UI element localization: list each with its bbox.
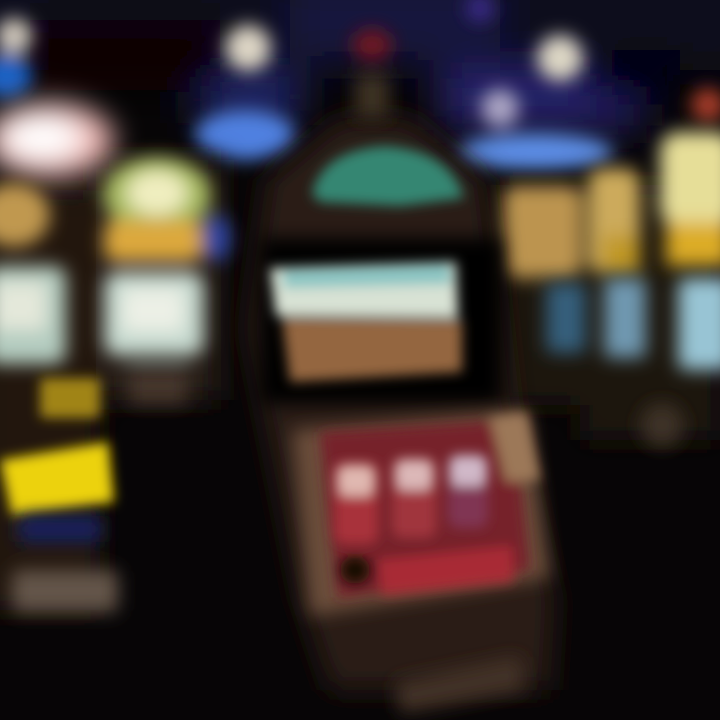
cabinet base [395, 656, 525, 714]
lower left details [12, 516, 118, 612]
screen [270, 262, 462, 382]
right screens [546, 278, 720, 447]
left machines [0, 102, 231, 612]
cabinet body [246, 118, 555, 690]
lower panel frame [292, 410, 550, 616]
red reel panel [320, 412, 540, 598]
red knob [352, 29, 392, 118]
left machine body [0, 160, 221, 610]
ceiling: dark blue and purple glow [0, 0, 720, 130]
yellow panels [0, 378, 114, 516]
second machine topper and screen [103, 157, 231, 404]
right toppers [502, 132, 720, 278]
ceiling lights [0, 0, 720, 171]
pink sign top [0, 102, 114, 178]
right machines [500, 132, 720, 447]
tan panel and left screen [0, 183, 66, 364]
right machine bodies [500, 185, 720, 440]
reels [334, 454, 488, 584]
central slot machine [246, 29, 555, 714]
dark band around screen [260, 238, 502, 404]
teal topper [312, 146, 464, 206]
